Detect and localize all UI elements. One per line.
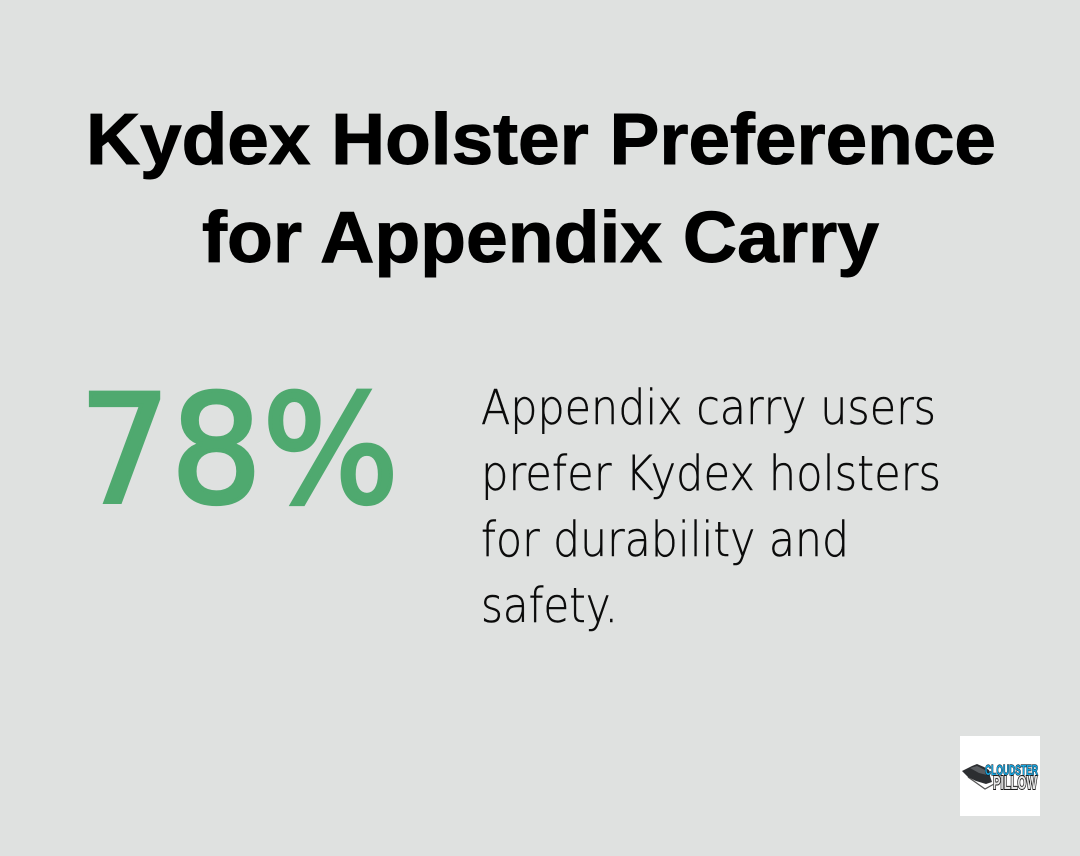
title: Kydex Holster Preference — [86, 100, 996, 180]
description text: for durability and — [481, 512, 849, 568]
description text: safety. — [481, 578, 618, 634]
logo: Cloudster Pillow — [960, 736, 1040, 816]
description text: prefer Kydex holsters — [481, 446, 941, 502]
big statistic: 78%: 78% — [79, 364, 399, 538]
logo wordmark — [985, 762, 1038, 793]
title — [86, 100, 996, 278]
description text: Appendix carry users — [481, 380, 936, 436]
description text — [481, 380, 941, 634]
logo wordmark: CLOUDSTER — [985, 762, 1038, 779]
title: for Appendix Carry — [202, 198, 879, 278]
logo wordmark: PILLOW — [993, 773, 1037, 793]
icon: pillow — [962, 764, 994, 789]
